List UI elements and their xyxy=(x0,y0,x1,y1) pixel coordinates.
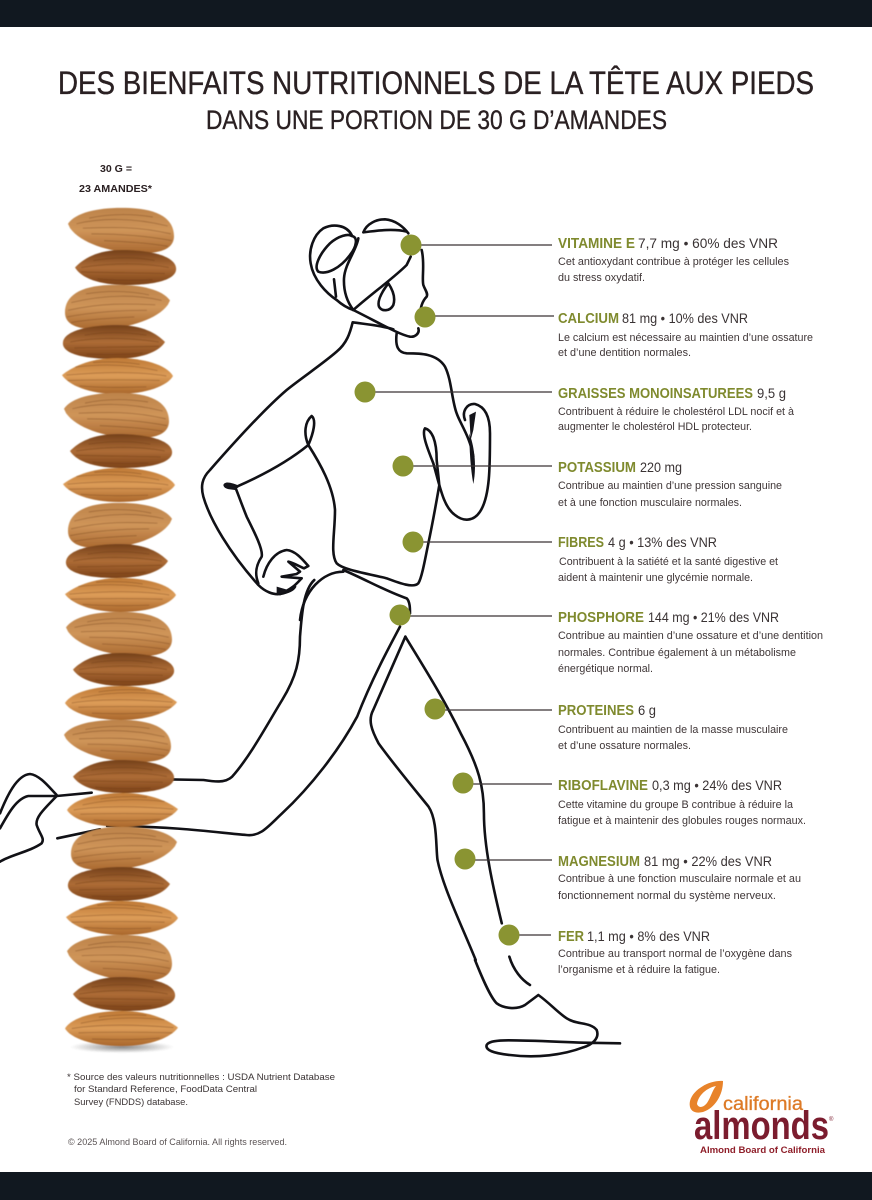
callout: phosphore: PHOSPHORE xyxy=(558,610,644,626)
almond stack xyxy=(62,208,178,1053)
serving label: 30 G = xyxy=(100,163,132,175)
callout: fer: Contribue au transport normal de l’oxygène dans xyxy=(558,948,792,960)
callout: potassium: et à une fonction musculaire normales. xyxy=(558,497,742,509)
title: DANS UNE PORTION DE 30 G D’AMANDES xyxy=(206,105,667,135)
copyright: © 2025 Almond Board of California. All rights reserved. xyxy=(68,1137,287,1148)
callout: fibres: 4 g • 13% des VNR xyxy=(608,535,717,550)
callout: graisses monoinsaturees xyxy=(354,382,795,433)
runner: front foot xyxy=(475,957,620,1056)
callout: phosphore: énergétique normal. xyxy=(558,663,653,675)
runner: back foot xyxy=(0,774,100,862)
callout: phosphore: 144 mg • 21% des VNR xyxy=(648,610,779,625)
almond shadow xyxy=(70,1041,174,1053)
footnote: Survey (FNDDS) database. xyxy=(74,1097,188,1108)
runner: head and torso xyxy=(202,219,490,620)
callout: proteines: 6 g xyxy=(638,703,656,718)
callout: fer: 1,1 mg • 8% des VNR xyxy=(587,929,710,944)
callout: riboflavine: RIBOFLAVINE xyxy=(558,778,648,794)
callout: calcium: et d’une dentition normales. xyxy=(558,347,691,359)
callout: riboflavine: 0,3 mg • 24% des VNR xyxy=(652,778,782,793)
callout: riboflavine: Cette vitamine du groupe B contribue à réduire la xyxy=(558,799,794,811)
serving label xyxy=(79,163,153,195)
callout: potassium xyxy=(392,456,782,509)
callout: calcium: 81 mg • 10% des VNR xyxy=(622,311,748,326)
callout: phosphore xyxy=(390,604,823,675)
callout: vitamine E: Cet antioxydant contribue à protéger les cellules xyxy=(558,256,789,268)
title xyxy=(58,65,814,135)
callout: graisses monoinsaturees: GRAISSES MONOINSATUREES xyxy=(558,386,753,402)
footnote: * Source des valeurs nutritionnelles : USDA Nutrient Database xyxy=(67,1072,335,1083)
callout: riboflavine: fatigue et à maintenir des globules rouges normaux. xyxy=(558,815,806,827)
bottom band xyxy=(0,1172,872,1200)
runner line drawing xyxy=(0,219,620,1056)
footnote: for Standard Reference, FoodData Central xyxy=(74,1084,257,1095)
callout: fibres xyxy=(402,532,778,584)
serving label: 23 AMANDES* xyxy=(79,183,153,195)
callout: potassium: Contribue au maintien d’une pression sanguine xyxy=(558,480,782,492)
callout: magnesium xyxy=(454,848,801,902)
runner: legs xyxy=(107,580,502,960)
callout: graisses monoinsaturees: 9,5 g xyxy=(757,386,786,401)
callout: fer xyxy=(498,924,792,976)
callout: magnesium: MAGNESIUM xyxy=(558,854,640,870)
callout: proteines: Contribuent au maintien de la masse musculaire xyxy=(558,724,788,736)
callout: vitamine E: VITAMINE E xyxy=(558,236,635,252)
logo: california almonds: Almond Board of California xyxy=(700,1145,826,1156)
footnote xyxy=(67,1072,335,1108)
logo: california almonds xyxy=(690,1081,834,1156)
callout: potassium: POTASSIUM xyxy=(558,460,636,476)
callout: fibres: aident à maintenir une glycémie normale. xyxy=(558,572,753,584)
callout: calcium: CALCIUM xyxy=(558,311,619,327)
callout: proteines: et d’une ossature normales. xyxy=(558,740,691,752)
callout: calcium: Le calcium est nécessaire au maintien d’une ossature xyxy=(558,332,813,344)
callout: riboflavine xyxy=(452,772,806,827)
callout: magnesium: Contribue à une fonction musculaire normale et au xyxy=(558,873,801,885)
callout: phosphore: Contribue au maintien d’une ossature et d’une dentition xyxy=(558,630,823,642)
callout: fer: l’organisme et à réduire la fatigue. xyxy=(558,964,720,976)
callout: magnesium: 81 mg • 22% des VNR xyxy=(644,854,772,869)
logo: california almonds: ® xyxy=(829,1116,834,1123)
callout: proteines xyxy=(424,698,788,752)
callout: graisses monoinsaturees: Contribuent à réduire le cholestérol LDL nocif et à xyxy=(558,406,795,418)
callout: vitamine E xyxy=(400,234,789,284)
callout: fibres: Contribuent à la satiété et la santé digestive et xyxy=(559,556,778,568)
callout: graisses monoinsaturees: augmenter le cholestérol HDL protecteur. xyxy=(558,421,752,433)
callout: vitamine E: du stress oxydatif. xyxy=(558,272,645,284)
icon: almond swirl xyxy=(690,1081,723,1113)
logo: california almonds: almonds xyxy=(694,1104,829,1148)
callout: fer: FER xyxy=(558,929,584,945)
callout: vitamine E: 7,7 mg • 60% des VNR xyxy=(638,236,778,251)
callout: calcium xyxy=(414,306,813,359)
top band xyxy=(0,0,872,27)
callout: proteines: PROTEINES xyxy=(558,703,634,719)
callout: fibres: FIBRES xyxy=(558,535,604,551)
logo: california almonds: california xyxy=(723,1094,803,1115)
callout: phosphore: normales. Contribue également à un métabolisme xyxy=(558,647,796,659)
callout: potassium: 220 mg xyxy=(640,460,682,475)
callout: magnesium: fonctionnement normal du système nerveux. xyxy=(558,890,776,902)
